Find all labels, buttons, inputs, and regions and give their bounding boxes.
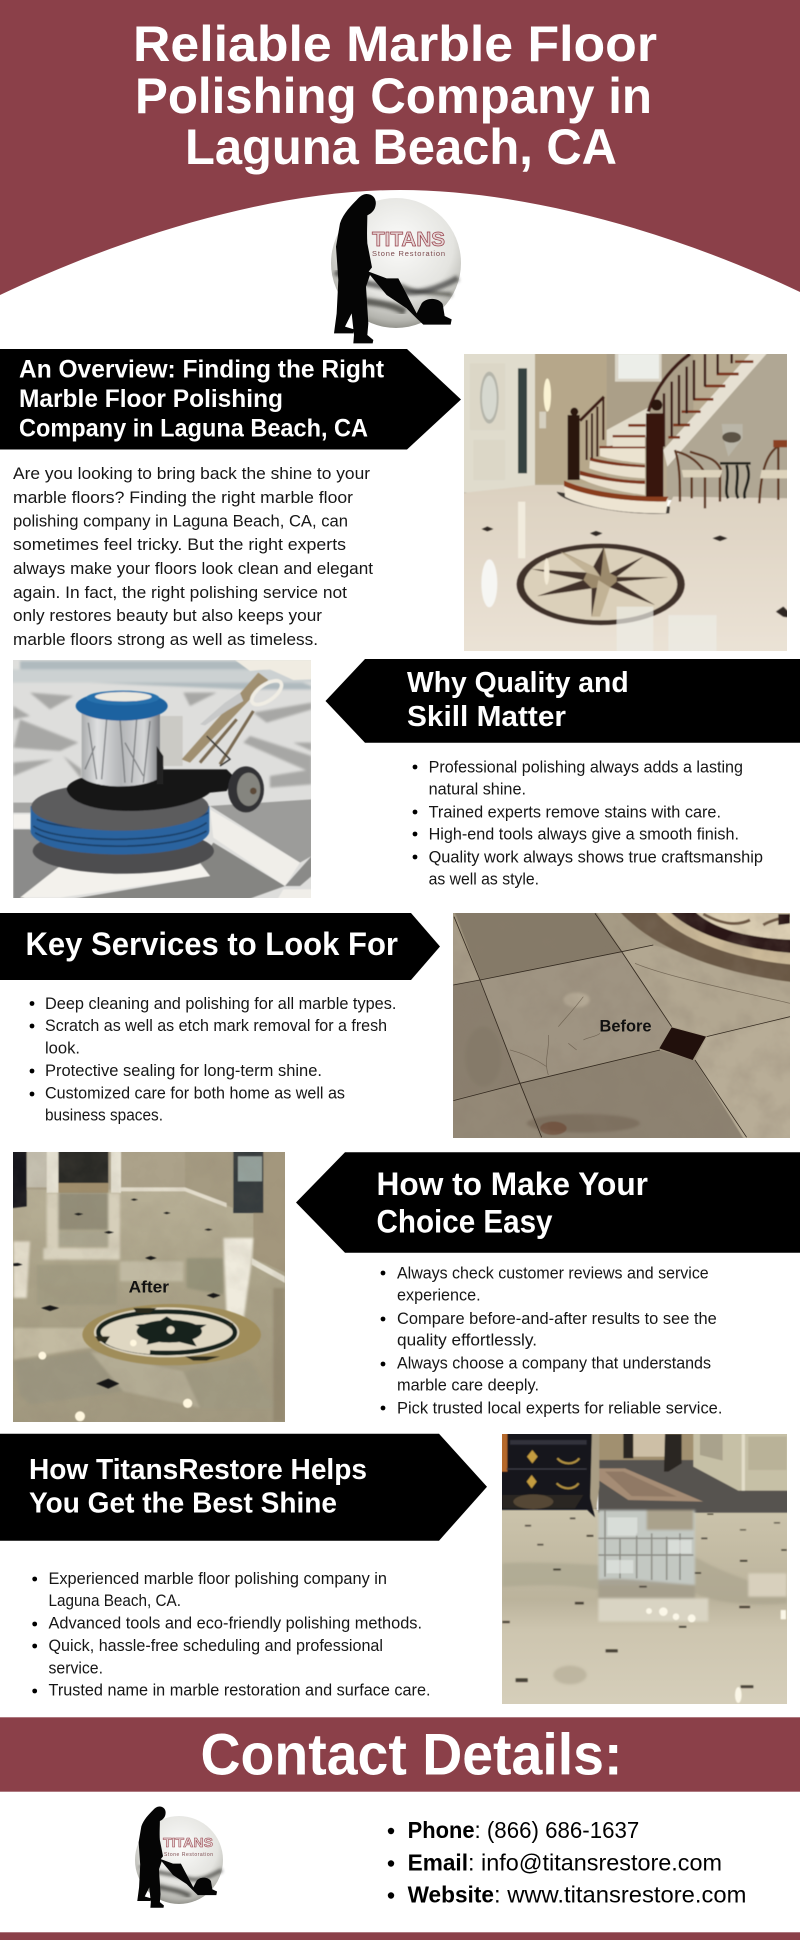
text block: overview paragraph: only restores beauty but also keeps your [13, 606, 322, 625]
list: why quality and skill matter: Quality work always shows true craftsmanship [429, 847, 763, 866]
list: key services: look. [45, 1038, 80, 1057]
list: why quality and skill matter: High-end tools always give a smooth finish. [429, 824, 739, 843]
list: key services: Protective sealing for long-term shine. [45, 1061, 322, 1080]
list: how titansrestore helps: service. [48, 1658, 103, 1677]
title: Reliable Marble Floor [133, 16, 657, 72]
label: before: Before [600, 1017, 652, 1036]
contact list: Email [408, 1850, 468, 1876]
contact banner [0, 1717, 800, 1792]
photo: before, dull stone tile floor [450, 910, 797, 1143]
list: key services: Customized care for both home as well as [45, 1084, 345, 1103]
list: how to make your choice easy: Always check customer reviews and service [397, 1264, 709, 1283]
list: key services: business spaces. [45, 1106, 163, 1125]
heading arrow: key services [0, 913, 440, 980]
list: how to make your choice easy: marble care deeply. [397, 1376, 539, 1395]
heading arrow: quality: Skill Matter [407, 701, 566, 733]
contact list: : (866) 686-1637 [474, 1817, 639, 1843]
heading arrow: titansrestore [0, 1434, 487, 1541]
list: how to make your choice easy [381, 1264, 722, 1417]
contact list: Phone [408, 1817, 474, 1843]
heading arrow: overview: Marble Floor Polishing [19, 385, 283, 413]
photo: floor polishing machine [10, 656, 317, 903]
photo: after, glossy marble floor [10, 1148, 290, 1428]
contact list: : www.titansrestore.com [494, 1882, 746, 1908]
list: key services: Scratch as well as etch mark removal for a fresh [45, 1016, 387, 1035]
list: how to make your choice easy: experience. [397, 1286, 481, 1305]
text block: overview paragraph [13, 464, 373, 649]
logo: Titans Stone Restoration: Stone Restoration [372, 249, 445, 258]
photo: glossy floor reflecting windows [500, 1430, 793, 1710]
list: how to make your choice easy: Pick trusted local experts for reliable service. [397, 1398, 722, 1417]
heading arrow: easy choice: Choice Easy [376, 1204, 553, 1240]
list: why quality and skill matter [413, 758, 763, 888]
logo: Titans small [135, 1806, 223, 1908]
text block: overview paragraph: Are you looking to bring back the shine to your [13, 464, 370, 483]
list: why quality and skill matter: as well as style. [429, 869, 539, 888]
text block: overview paragraph: marble floors strong as well as timeless. [13, 630, 318, 649]
text block: overview paragraph: polishing company in Laguna Beach, CA, can [13, 512, 348, 530]
list: how titansrestore helps: Quick, hassle-free scheduling and professional [48, 1636, 383, 1655]
list: how titansrestore helps: Laguna Beach, CA. [48, 1591, 181, 1610]
list: how titansrestore helps: Trusted name in marble restoration and surface care. [48, 1681, 430, 1700]
list: key services [30, 994, 396, 1125]
heading arrow: overview: An Overview: Finding the Right [19, 356, 385, 384]
title [133, 16, 657, 175]
logo: Titans Stone Restoration [331, 194, 461, 343]
heading arrow: easy choice: How to Make Your [376, 1166, 648, 1202]
photo: foyer with staircase and compass medallion [460, 350, 793, 657]
heading arrow: titansrestore: You Get the Best Shine [29, 1488, 337, 1520]
list: how titansrestore helps: Advanced tools and eco-friendly polishing methods. [48, 1614, 422, 1633]
contact banner: Contact Details: [200, 1722, 622, 1787]
header banner [0, 0, 800, 295]
title: Laguna Beach, CA [185, 119, 617, 175]
heading arrow: titansrestore: How TitansRestore Helps [29, 1454, 367, 1486]
list: why quality and skill matter: natural shine. [429, 780, 526, 799]
list: why quality and skill matter: Trained experts remove stains with care. [429, 803, 721, 822]
heading arrow: overview [0, 349, 461, 450]
logo: Titans small: Stone Restoration [164, 1852, 213, 1858]
list: how to make your choice easy: quality effortlessly. [397, 1331, 537, 1350]
list: how to make your choice easy: Compare before-and-after results to see the [397, 1309, 717, 1328]
logo: Titans small: TITANS [163, 1835, 213, 1850]
logo: Titans Stone Restoration: TITANS [372, 229, 445, 251]
text block: overview paragraph: always make your floors look clean and elegant [13, 559, 373, 578]
heading arrow: key services: Key Services to Look For [26, 926, 398, 962]
text block: overview paragraph: marble floors? Finding the right marble floor [13, 488, 353, 507]
title: Polishing Company in [135, 68, 652, 124]
footer band [0, 1932, 800, 1940]
contact list [388, 1817, 746, 1908]
label: after: After [129, 1278, 169, 1297]
list: how titansrestore helps [32, 1569, 431, 1700]
text block: overview paragraph: sometimes feel tricky. But the right experts [13, 535, 346, 554]
list: how to make your choice easy: Always choose a company that understands [397, 1354, 711, 1373]
heading arrow: quality: Why Quality and [407, 667, 629, 699]
heading arrow: overview: Company in Laguna Beach, CA [19, 414, 368, 442]
list: key services: Deep cleaning and polishing for all marble types. [45, 994, 396, 1013]
text block: overview paragraph: again. In fact, the right polishing service not [13, 583, 347, 602]
heading arrow: quality [326, 659, 800, 743]
contact list: : info@titansrestore.com [468, 1850, 722, 1876]
contact list: Website [408, 1882, 494, 1908]
list: how titansrestore helps: Experienced marble floor polishing company in [48, 1569, 387, 1588]
heading arrow: easy choice [296, 1152, 800, 1253]
list: why quality and skill matter: Professional polishing always adds a lasting [429, 758, 743, 777]
